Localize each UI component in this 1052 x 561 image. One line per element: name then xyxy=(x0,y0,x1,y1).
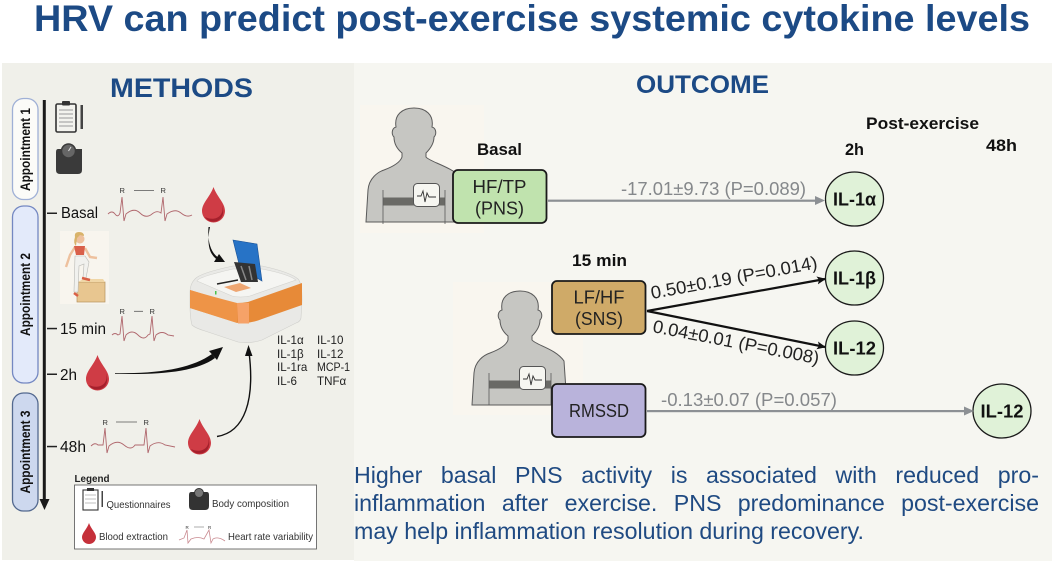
icon: body scale xyxy=(56,144,82,174)
illustration: stepping exercise xyxy=(60,231,109,304)
ecg: basal xyxy=(108,186,192,221)
cytokine list: MCP-1 xyxy=(317,361,350,374)
ecg: 15 min: R xyxy=(150,307,156,316)
circle: IL-1β: IL-1β xyxy=(833,268,876,288)
cytokine list: IL-12 xyxy=(317,348,343,361)
legend: Legend xyxy=(74,474,110,485)
icon: blood drop 48h xyxy=(188,419,211,454)
arrow: basal blood to analyser xyxy=(208,227,225,262)
cytokine list xyxy=(277,334,350,388)
appointment 2 pill xyxy=(12,206,38,383)
legend icon: blood drop xyxy=(82,523,96,544)
illustration: multiplex analyser xyxy=(190,240,302,343)
timeline arrow xyxy=(40,100,50,510)
legend xyxy=(74,474,316,549)
value: HF/TP effect: -17.01±9.73 (P=0.089) xyxy=(621,179,806,199)
label: 15 min: 15 min xyxy=(572,251,627,270)
cytokine list: IL-6 xyxy=(277,375,297,388)
cytokine list: IL-1β xyxy=(277,348,304,361)
circle: IL-12 at 48h: IL-12 xyxy=(980,402,1024,422)
panel: outcome xyxy=(354,63,1052,561)
circle: IL-1α xyxy=(826,172,884,226)
person with HR strap: 15 min xyxy=(453,282,583,415)
box: HF/TP (PNS): HF/TP xyxy=(472,176,526,197)
box: LF/HF (SNS) xyxy=(552,281,646,334)
arrow: HF/TP to IL-1α xyxy=(548,196,825,205)
box: RMSSD: RMSSD xyxy=(569,400,629,421)
icon: blood drop 2h xyxy=(86,355,109,391)
ecg: basal: R xyxy=(160,186,166,195)
legend icon: ecg: R xyxy=(186,525,190,530)
legend text: heart rate variability: Heart rate variability xyxy=(228,531,314,543)
icon: questionnaire clipboard xyxy=(56,101,83,132)
circle: IL-12 at 2h xyxy=(826,321,884,375)
cytokine list: IL-1ra xyxy=(277,361,308,374)
methods heading: METHODS xyxy=(110,73,253,103)
circle: IL-12 at 2h: IL-12 xyxy=(833,338,876,358)
cytokine list: TNFα xyxy=(317,375,347,388)
arrow: RMSSD to IL-12 xyxy=(647,406,974,416)
ecg: 48h: R xyxy=(102,418,108,427)
label: 2h: 2h xyxy=(845,140,864,159)
label: 2h tick xyxy=(47,367,77,384)
appointment 2 pill: Appointment 2 xyxy=(17,253,33,336)
label: 15 min tick: 15 min xyxy=(60,321,106,338)
arrow: 2h blood to analyser xyxy=(115,347,223,374)
label: 48h: 48h xyxy=(986,136,1017,155)
cytokine list: IL-10 xyxy=(317,334,343,347)
arrow: LF/HF to IL-12 xyxy=(647,311,825,347)
box: LF/HF (SNS): LF/HF xyxy=(574,286,624,308)
box: HF/TP (PNS) xyxy=(453,170,546,223)
legend text: body composition: Body composition xyxy=(212,498,289,510)
ecg: basal: R xyxy=(120,186,126,195)
legend icon: ecg xyxy=(179,525,225,543)
cytokine list: IL-1α xyxy=(277,334,304,347)
value: IL-1β effect: 0.50±0.19 (P=0.014) xyxy=(649,252,819,303)
label: 48h tick: 48h xyxy=(60,439,86,456)
person with HR strap: basal xyxy=(360,105,484,233)
label: Basal tick: Basal xyxy=(61,205,98,222)
appointment 3 pill: Appointment 3 xyxy=(17,410,33,494)
value: IL-12 effect: 0.04±0.01 (P=0.008) xyxy=(651,316,821,368)
appointment 3 pill xyxy=(12,393,38,511)
arrow: 48h blood to analyser xyxy=(217,345,252,436)
legend icon: questionnaire xyxy=(83,488,103,510)
label: 2h tick: 2h xyxy=(60,367,77,384)
conclusion text: Higher basal PNS activity is associated with reduced pro- xyxy=(354,462,1039,488)
ecg: 15 min xyxy=(112,307,174,341)
ecg: 15 min: R xyxy=(120,307,126,316)
circle: IL-1α: IL-1α xyxy=(833,190,876,210)
arrow: LF/HF to IL-1β xyxy=(647,279,825,311)
appointment 1 pill xyxy=(12,98,38,200)
label: 48h tick xyxy=(47,439,86,456)
ecg: 48h xyxy=(91,418,175,453)
ecg: 48h: R xyxy=(144,418,150,427)
circle: IL-12 at 48h xyxy=(973,384,1031,438)
conclusion text: inflammation after exercise. PNS predominance post-exercise xyxy=(354,490,1039,516)
box: RMSSD xyxy=(552,384,646,437)
panel: methods xyxy=(2,63,354,560)
box: HF/TP (PNS): (PNS) xyxy=(475,198,524,218)
value: RMSSD effect: -0.13±0.07 (P=0.057) xyxy=(661,390,837,410)
icon: blood drop basal xyxy=(202,187,225,222)
circle: IL-1β xyxy=(826,251,884,305)
conclusion text: may help inflammation resolution during recovery. xyxy=(354,518,864,544)
legend icon: scale xyxy=(189,488,209,510)
box: LF/HF (SNS): (SNS) xyxy=(575,308,623,329)
appointment 1 pill: Appointment 1 xyxy=(17,108,33,191)
legend text: blood extraction: Blood extraction xyxy=(99,531,168,543)
label: basal: Basal xyxy=(477,140,522,159)
label: post-exercise: Post-exercise xyxy=(866,114,979,133)
outcome heading: OUTCOME xyxy=(636,71,769,99)
legend text: questionnaires: Questionnaires xyxy=(106,499,170,511)
legend icon: ecg: R xyxy=(208,525,212,530)
conclusion text xyxy=(354,462,1039,544)
